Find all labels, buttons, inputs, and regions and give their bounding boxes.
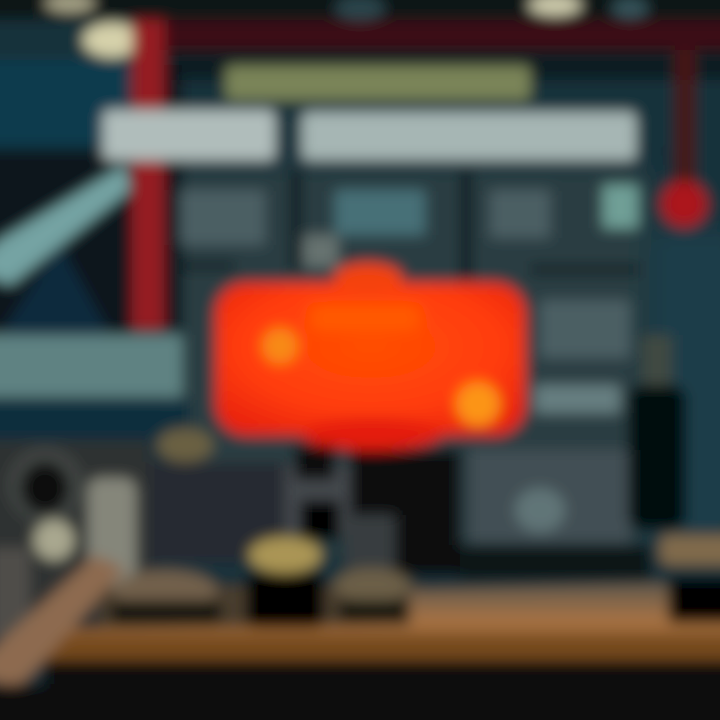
central cup with gold lid: [246, 537, 324, 628]
dark post beside pillar: [164, 65, 182, 330]
shelf dark dividers: [175, 170, 640, 280]
right monitor panel: [460, 450, 650, 580]
central dark figures below the card: [150, 428, 460, 575]
dark foreground table edge: [0, 660, 720, 720]
left clutter objects: [0, 440, 150, 640]
right cup: [660, 535, 720, 623]
shelf grid behind the card: [180, 185, 638, 413]
glowing orange card: [216, 263, 525, 450]
red vertical pillar: [132, 20, 164, 330]
dark bowl on desk: [110, 570, 222, 624]
top dark beam and red girder: [0, 0, 720, 80]
small bowl on desk: [334, 568, 410, 622]
left stair railing and landing: [0, 150, 182, 397]
right dark bottle: [628, 335, 686, 530]
main title band (illegible in reference): [103, 110, 636, 160]
ceiling lights: [45, 0, 648, 57]
eyebrow heading (illegible in reference): [226, 66, 530, 100]
top left blue panel: [0, 60, 130, 145]
wooden desk surface: [0, 555, 720, 690]
right red pillar and lamp: [661, 50, 707, 227]
